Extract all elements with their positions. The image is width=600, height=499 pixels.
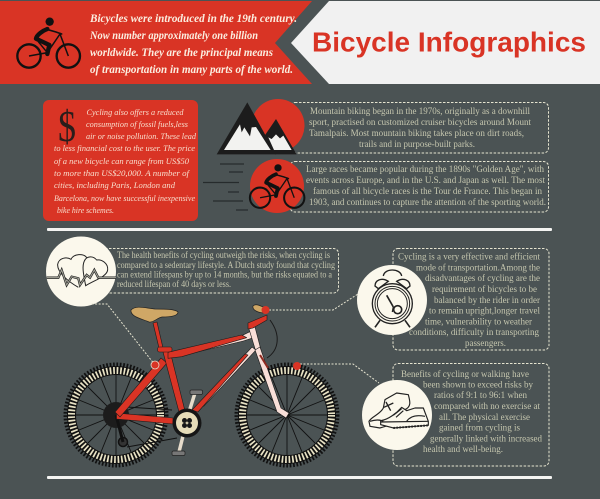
banner text: Bicycles were introduced in the 19th century. — [89, 13, 297, 25]
handlebar grip — [253, 305, 265, 313]
frame — [115, 315, 289, 424]
banner text: Now number approximately one billion — [89, 30, 258, 42]
text box: mountain biking: trails and in purpose-built parks. — [359, 139, 475, 150]
banner text: of transportation in many parts of the world. — [90, 64, 293, 76]
icon: hearts with pulse — [46, 236, 116, 306]
rear wheel — [66, 364, 166, 466]
text box: effective transportation: disadvantages of cycling are the — [425, 273, 541, 284]
text box: benefits of exercise: health and well-being. — [423, 444, 503, 455]
panel text: consumption of fossil fuels,less — [86, 120, 188, 129]
text box: effective transportation — [393, 248, 549, 350]
icon: mountains — [217, 99, 304, 154]
icon: alarm clock — [357, 265, 427, 335]
front wheel — [236, 364, 338, 466]
title banner — [291, 1, 600, 84]
banner text: worldwide. They are the principal means — [90, 47, 273, 59]
divider bottom — [47, 476, 552, 479]
text box: mountain biking — [290, 102, 548, 153]
panel text: cities, including Paris, London and — [54, 181, 176, 190]
banner text — [89, 13, 297, 76]
text box: effective transportation: Cycling is a very effective and efficient — [398, 252, 540, 262]
text box: benefits of exercise: ratios of 9:1 to 96:1 when — [434, 390, 527, 401]
panel: cost of cycling — [43, 100, 198, 221]
panel text — [54, 108, 197, 215]
text box: benefits of exercise: Benefits of cycling or walking have — [401, 369, 530, 380]
panel text: Cycling also offers a reduced — [86, 108, 184, 117]
text box: benefits of exercise: all. The physical exercise — [439, 412, 531, 423]
text box: health benefits: reduced lifespan of 40 days or less. — [117, 279, 231, 289]
text box: races — [290, 162, 548, 212]
panel text: of a new bicycle can range from US$50 — [54, 157, 190, 166]
icon: speeding cyclist — [203, 159, 304, 213]
text box: mountain biking: Tamalpais. Most mountain biking takes place on dirt roads, — [309, 128, 524, 139]
text box: races: 1903, and continues to capture the attention of the sporting world. — [309, 197, 546, 208]
text box: effective transportation: time, vulnerability to weather — [425, 316, 533, 328]
marker dots — [151, 306, 301, 370]
illustration: bicycle — [66, 305, 338, 466]
drivetrain — [103, 402, 177, 447]
connector: shoes — [300, 364, 379, 383]
cranks and pedals — [172, 390, 202, 456]
connector: clock — [269, 294, 358, 310]
chainring — [172, 408, 202, 438]
panel text: air or noise pollution. These lead — [86, 132, 197, 141]
text box: effective transportation: passengers. — [465, 338, 506, 349]
text box: benefits of exercise — [393, 364, 549, 466]
brake cable — [260, 320, 277, 368]
panel text: to less financial cost to the user. The price — [54, 144, 195, 153]
connector: health — [90, 304, 155, 365]
text box: effective transportation: conditions, difficulty in transporting — [409, 327, 539, 338]
saddle — [131, 307, 178, 322]
panel text: Barcelona, now have successful inexpensive — [54, 194, 195, 203]
text box: mountain biking: sport, practised on customized cruiser bicycles around Mount — [309, 117, 531, 128]
text box: races: events across Europe, and in the U.S. and Japan as well. The most — [306, 175, 545, 186]
text box: health benefits: The health benefits of cycling outweigh the risks, when cycling is — [117, 250, 330, 260]
text box: effective transportation: balanced by the rider in order — [434, 295, 541, 306]
text box: benefits of exercise: compared with no exercise at — [434, 401, 540, 412]
title: Bicycle Infographics — [312, 26, 586, 58]
text box: health benefits: compared to a sedentary lifestyle. A Dutch study found that cycling — [117, 260, 335, 270]
icon: cyclist — [17, 17, 80, 68]
text box: benefits of exercise: been shown to exceed risks by — [423, 380, 533, 390]
panel text: bike hire schemes. — [57, 206, 114, 215]
icon: dollar sign: $ — [58, 102, 76, 151]
text box: effective transportation: requirement of bicycles to be — [432, 284, 538, 295]
text box: health benefits — [100, 248, 338, 293]
banner: introduction — [0, 1, 312, 84]
text box: effective transportation: to remain upright,longer travel — [429, 306, 540, 316]
text box: health benefits: can extend lifespans by up to 14 months, but the risks equated to a — [117, 270, 332, 280]
text box: races: Large races became popular during the 1890s "Golden Age", with — [306, 164, 544, 175]
text box: races: famous of all bicycle races is the Tour de France. This began in — [313, 186, 542, 197]
panel text: to more than US$20,000. A number of — [54, 169, 191, 178]
icon: sneakers — [362, 380, 432, 450]
text box: mountain biking: Mountain biking began in the 1970s, originally as a downhill — [310, 106, 530, 117]
text box: benefits of exercise: generally linked with increased — [430, 434, 542, 444]
text box: effective transportation: mode of transportation.Among the — [416, 262, 541, 274]
divider top — [47, 228, 552, 231]
text box: benefits of exercise: gained from cycling is — [439, 422, 520, 434]
